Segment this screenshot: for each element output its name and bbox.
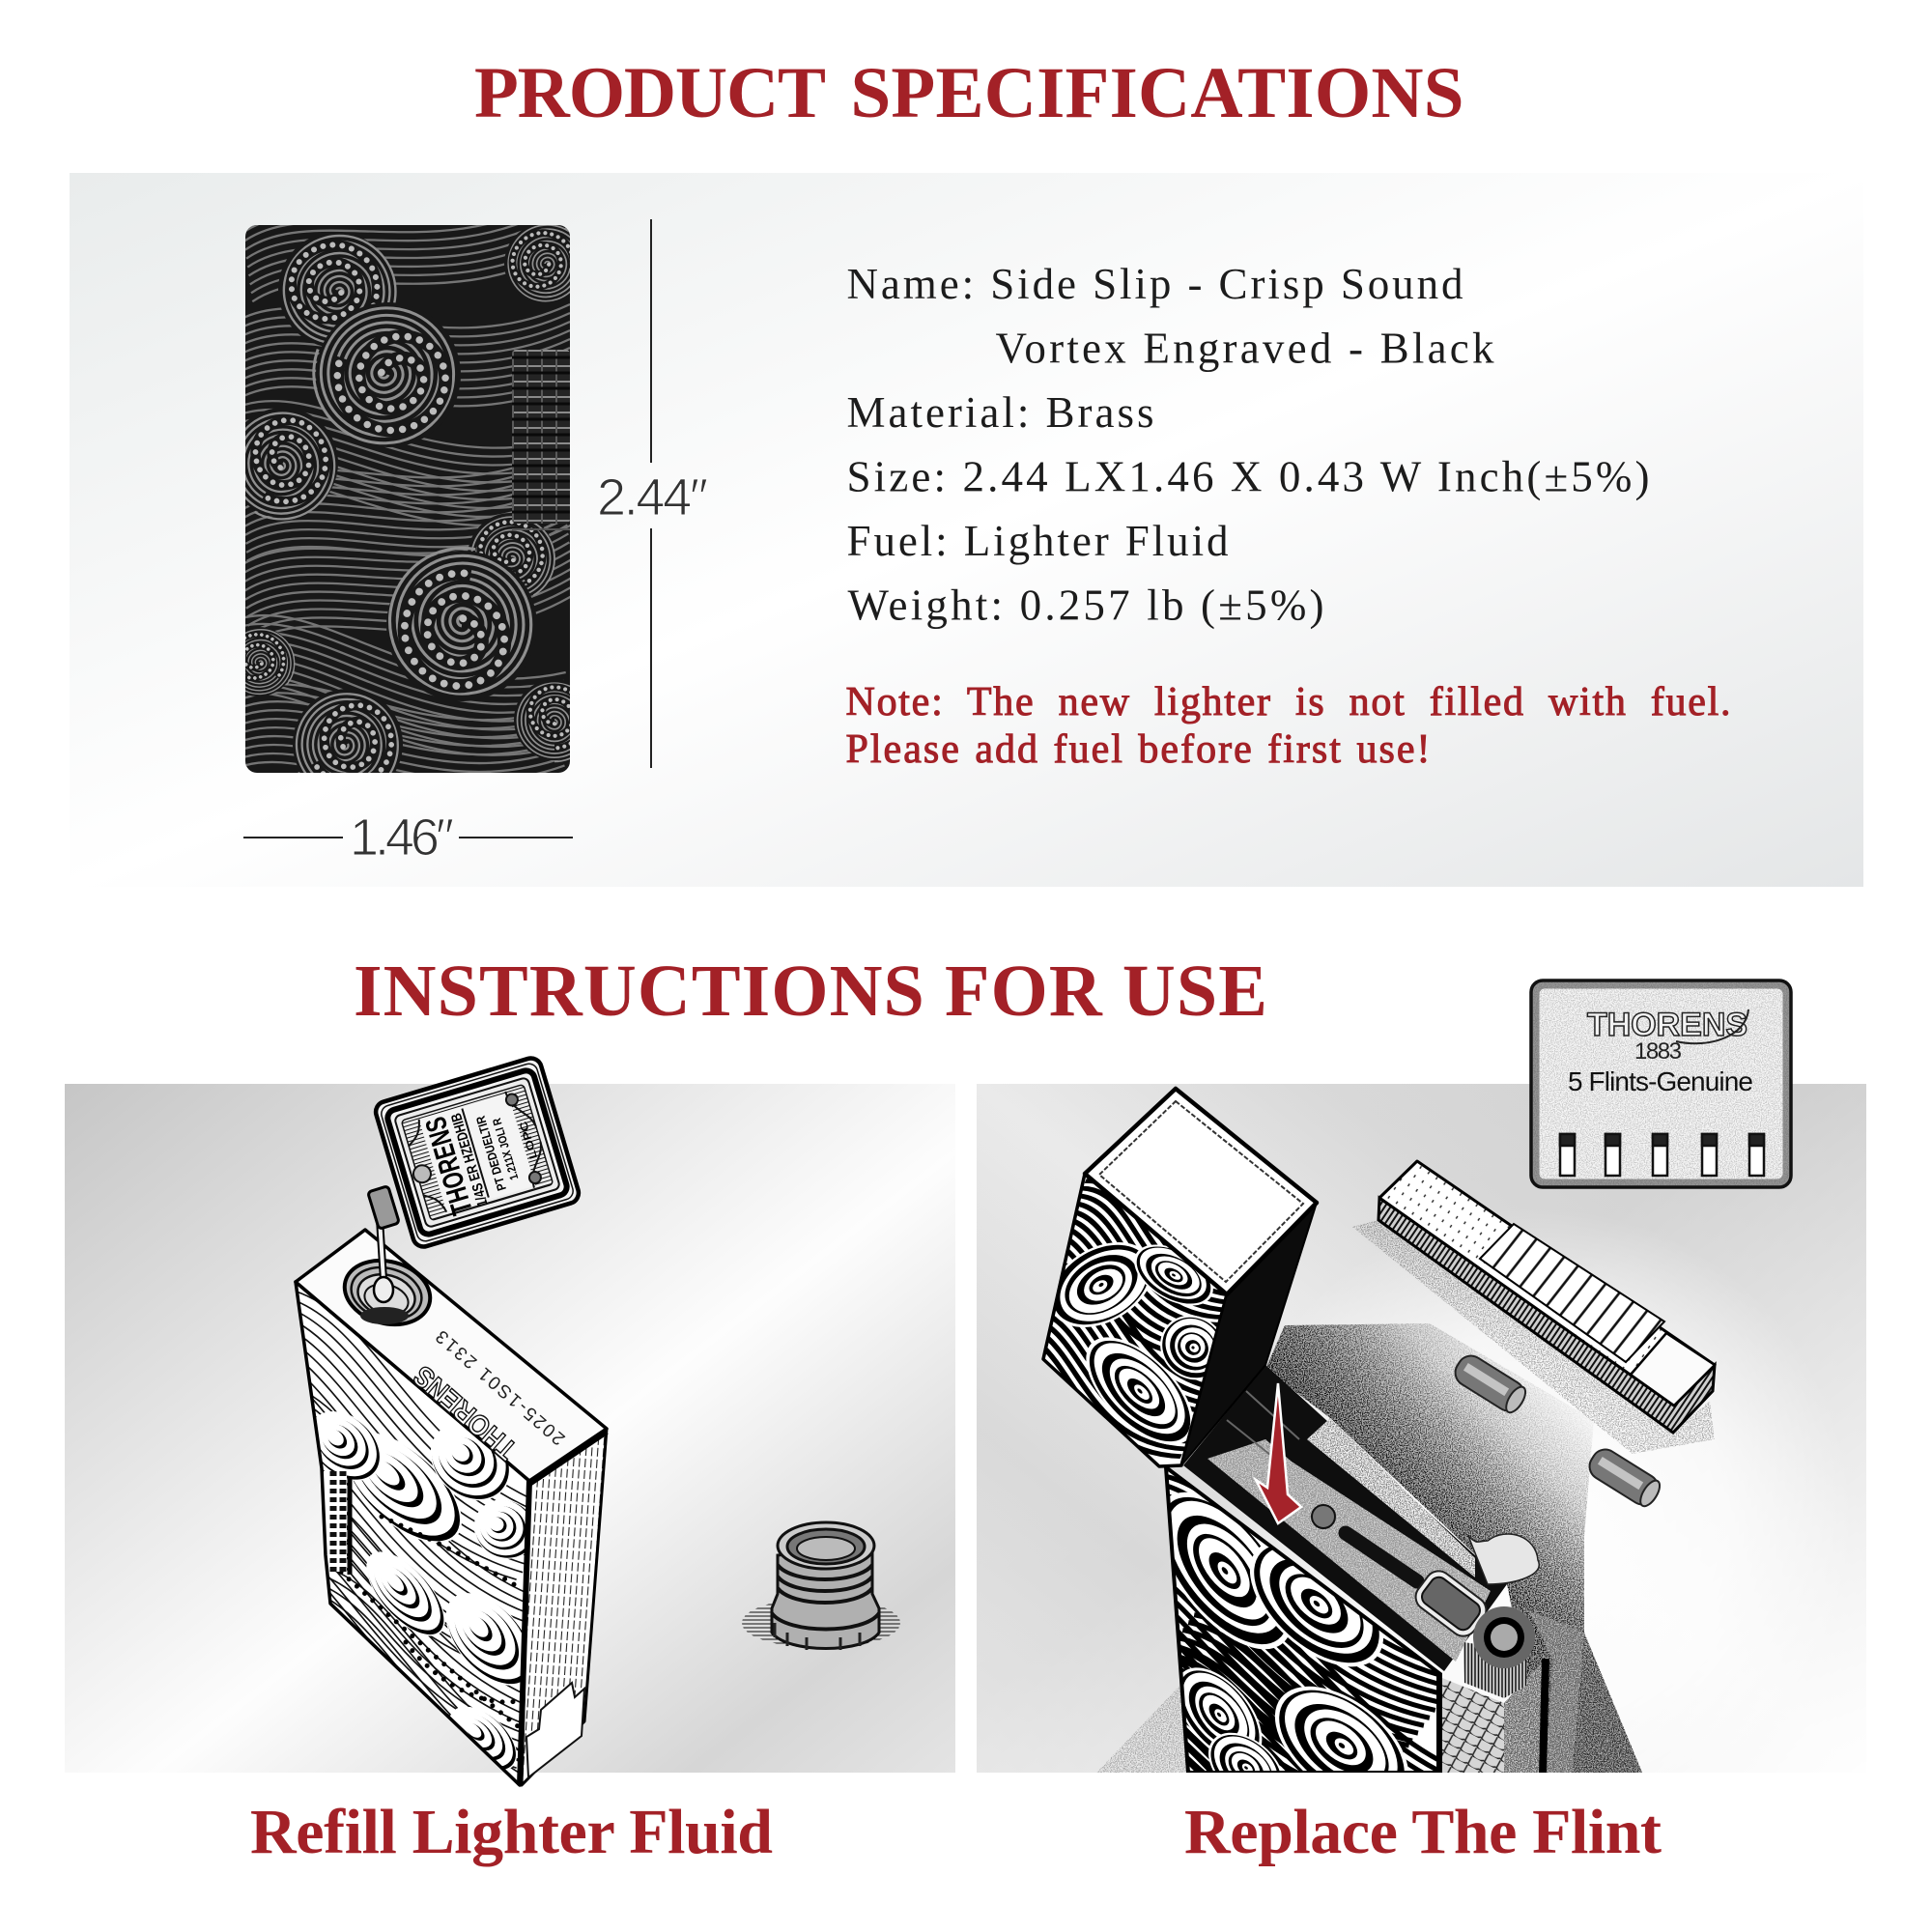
- panel: specifications: [70, 164, 1863, 887]
- lighter engraved body: [1166, 1467, 1440, 1773]
- icon: open refill cap with label: THORENS: [420, 1113, 479, 1218]
- icon: fuel hole with drop: [337, 1186, 438, 1334]
- icon: open refill cap with label: 1/4S ER HZEDHIB: [448, 1111, 492, 1208]
- card brand text: THORENS: [1587, 1007, 1747, 1043]
- dotted rows: [333, 1517, 522, 1729]
- icon: roller and wheel: [1439, 1606, 1584, 1775]
- lid top: [1085, 1089, 1317, 1294]
- lighter front face: [296, 1282, 529, 1785]
- text block: specifications list: [846, 260, 1650, 630]
- icon: spare flint two: [1584, 1444, 1664, 1510]
- icon: spare flint one: [1450, 1350, 1530, 1416]
- callout: fuel note: Please add fuel before first use!: [846, 727, 1430, 772]
- dimension: height 2.44 inches: 2.44″: [597, 469, 708, 526]
- icon: flint card: [1531, 980, 1791, 1187]
- card year: 1883: [1634, 1038, 1682, 1065]
- icon: lighter body with open interior: [1164, 1366, 1584, 1773]
- lighter side face: [522, 1429, 607, 1785]
- icon: lighter body seen from the top: THORENS: [408, 1359, 524, 1465]
- panel: refill lighter fluid: [65, 1056, 955, 1787]
- icon: flint in lighter: [1414, 1570, 1488, 1637]
- text block: specifications list: Fuel: Lighter Fluid: [846, 517, 1229, 565]
- text block: specifications list: Name: Side Slip - Crisp Sound: [846, 260, 1463, 308]
- lid side: [1181, 1203, 1317, 1465]
- stippled shadow: [1096, 1220, 1715, 1773]
- card flint slots: [1560, 1134, 1764, 1176]
- callout: fuel note: Note: The new lighter is not filled with fuel.: [846, 680, 1731, 724]
- icon: open refill cap with label: PT DEDUELTIR: [473, 1114, 509, 1192]
- text block: specifications list: Vortex Engraved - Black: [995, 325, 1494, 373]
- icon: engraved lighter front view: [245, 225, 570, 773]
- text block: specifications list: Size: 2.44 LX1.46 X 0.43 W Inch(±5%): [846, 452, 1650, 500]
- icon: flint tube spring: [1378, 1161, 1715, 1433]
- title: instructions for use: INSTRUCTIONS FOR USE: [354, 951, 1267, 1032]
- ribbed strip: [324, 1471, 347, 1572]
- title: product specifications: PRODUCT: [474, 53, 826, 133]
- lighter interior: [1183, 1365, 1507, 1671]
- callout: fuel note: [846, 680, 1731, 772]
- icon: lighter body seen from the top: [294, 1185, 609, 1787]
- card caption: 5 Flints-Genuine: [1568, 1066, 1753, 1096]
- text block: specifications list: Weight: 0.257 lb (±5%): [848, 582, 1323, 630]
- icon: ribbed roller: [512, 350, 570, 524]
- arrow: insert flint: [1256, 1383, 1301, 1523]
- text block: specifications list: Material: Brass: [846, 388, 1153, 437]
- title: product specifications: SPECIFICATIONS: [850, 53, 1464, 133]
- icon: lighter body seen from the top: 2025-1S01 2313: [432, 1325, 569, 1449]
- panel: replace the flint: [977, 1084, 1866, 1773]
- icon: open refill cap with label: LOPC: [518, 1120, 540, 1160]
- icon: open refill cap with label: 1.211X JOLI R: [490, 1117, 521, 1181]
- caption: replace the flint: Replace The Flint: [1184, 1797, 1662, 1867]
- dimension: width 1.46 inches: 1.46″: [350, 809, 454, 867]
- icon: open lid: [1041, 1086, 1320, 1468]
- lighter top face: [296, 1230, 607, 1481]
- icon: cotton wadding: [1468, 1534, 1539, 1584]
- icon: open refill cap with label: [373, 1056, 582, 1249]
- caption: refill lighter fluid: Refill Lighter Fluid: [250, 1797, 773, 1867]
- icon: threaded screw cap: [742, 1522, 900, 1650]
- title: product specifications: [474, 53, 1464, 133]
